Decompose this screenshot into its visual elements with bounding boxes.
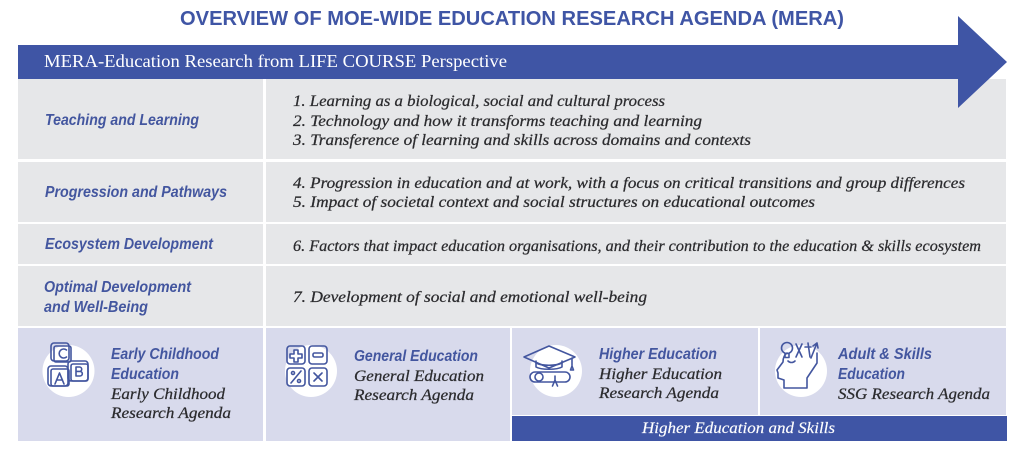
panel: Adult and Skills Education: Adult & Skills (837, 346, 932, 363)
row: Teaching and Learning (18, 79, 1006, 159)
panel: Higher Education: Research Agenda (598, 385, 719, 402)
row: Ecosystem Development: Ecosystem Development (45, 236, 214, 253)
row: Optimal Development and Well-Being: Optimal Development (44, 279, 192, 296)
panel: Adult and Skills Education (760, 328, 1006, 415)
row: Optimal Development and Well-Being: 7. Development of social and emotional well-being (293, 289, 647, 306)
row: Ecosystem Development (18, 224, 1006, 264)
bar: Higher Education and Skills (512, 416, 1007, 441)
row: Ecosystem Development: 6. Factors that impact education organisations, and their contribution to the education & skills ecosystem (293, 238, 981, 255)
arrow banner: MERA-Education Research from LIFE COURSE Perspective (44, 51, 507, 71)
panel: Adult and Skills Education: SSG Research Agenda (838, 386, 990, 403)
panel: Higher Education (512, 328, 758, 415)
row: Progression and Pathways: 5. Impact of societal context and social structures on educational outcomes (293, 194, 815, 211)
panel: Adult and Skills Education: Education (838, 366, 905, 383)
panel: General Education: General Education (354, 348, 478, 365)
icon: head with ideas (775, 342, 827, 397)
title: OVERVIEW OF MOE-WIDE EDUCATION RESEARCH AGENDA (MERA) (180, 7, 844, 30)
icon: graduation cap and diploma (524, 345, 582, 397)
panel: research themes table (18, 79, 1006, 326)
row: Teaching and Learning: 2. Technology and how it transforms teaching and learning (293, 113, 702, 130)
panel: Higher Education: Higher Education (598, 366, 722, 383)
row: Progression and Pathways (18, 162, 1006, 222)
icon: alphabet blocks (42, 343, 94, 397)
row: Teaching and Learning: 1. Learning as a biological, social and cultural process (293, 93, 665, 110)
panel: Early Childhood Education: Early Childhood (111, 346, 219, 363)
row: Progression and Pathways: Progression and Pathways (45, 184, 227, 201)
panel: General Education (266, 328, 510, 441)
row: Optimal Development and Well-Being: and Well-Being (44, 299, 148, 316)
panel: Early Childhood Education (18, 328, 263, 441)
panel: Early Childhood Education: Research Agenda (110, 405, 231, 422)
panel: General Education: General Education (354, 368, 484, 385)
row: Progression and Pathways: 4. Progression in education and at work, with a focus on critical transitions and group differences (293, 175, 965, 192)
arrow banner (18, 16, 1007, 108)
bar: Higher Education and Skills: Higher Education and Skills (641, 420, 835, 437)
panel: General Education: Research Agenda (353, 387, 474, 404)
panel: Early Childhood Education: Early Childhood (110, 386, 226, 403)
icon: calculator symbols (285, 345, 337, 397)
row: Teaching and Learning: 3. Transference of learning and skills across domains and contexts (292, 132, 751, 149)
panel: Early Childhood Education: Education (111, 366, 179, 383)
row: Teaching and Learning: Teaching and Learning (45, 112, 199, 129)
row: Optimal Development and Well-Being (18, 266, 1006, 326)
panel: Higher Education: Higher Education (599, 346, 717, 363)
